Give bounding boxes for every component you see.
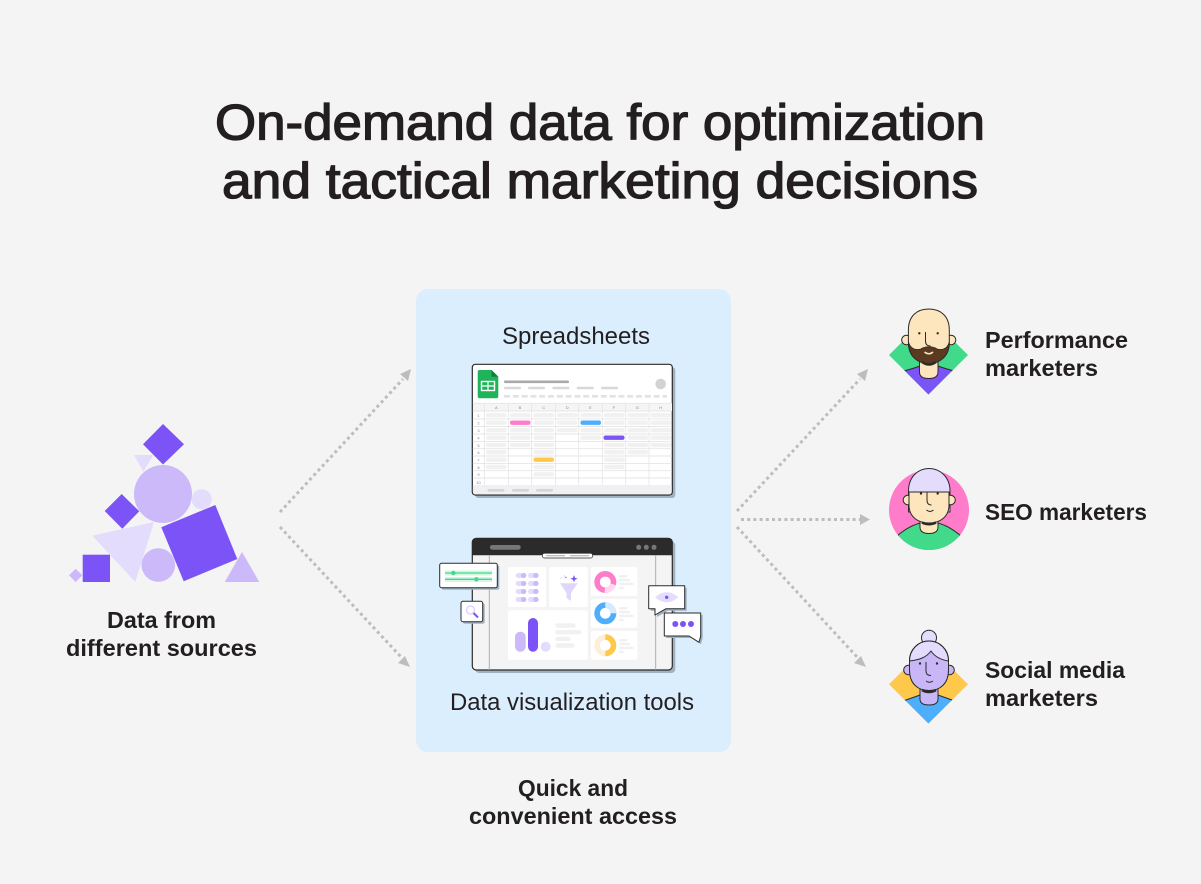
- arrow: sources to spreadsheets: [280, 369, 411, 512]
- callout: sliders: [440, 563, 499, 590]
- avatar: SEO marketer: [889, 468, 969, 555]
- grid: E: [589, 405, 592, 410]
- avatar: performance marketer: [889, 309, 968, 400]
- panel: quick and convenient access: [416, 289, 731, 752]
- grid: C: [542, 405, 545, 410]
- avatar: social media marketer: [889, 630, 968, 730]
- label: quick and convenient access: convenient access: [469, 803, 677, 829]
- grid: 2: [477, 420, 480, 426]
- icon: data sources geometric shapes: [69, 424, 259, 582]
- card: yellow donut: [591, 631, 637, 660]
- grid: H: [659, 405, 662, 410]
- label: quick and convenient access: Quick and: [518, 775, 628, 801]
- label: quick and convenient access: [469, 775, 677, 829]
- grid: 5: [477, 443, 480, 448]
- label: social media marketers: Social media: [985, 657, 1125, 683]
- grid: 10: [476, 480, 481, 485]
- title: On-demand data for optimization: [215, 94, 985, 150]
- grid: 6: [477, 450, 480, 455]
- arrow: to performance marketers: [737, 369, 868, 511]
- grid: F: [613, 405, 616, 410]
- label: SEO marketers: SEO marketers: [985, 499, 1147, 525]
- spreadsheet window: [472, 364, 675, 498]
- grid: 7: [477, 458, 480, 462]
- heading: data visualization tools: Data visualization tools: [450, 689, 694, 716]
- label: social media marketers: marketers: [985, 685, 1098, 711]
- grid: G: [636, 405, 639, 410]
- highlighted cells: [510, 420, 624, 462]
- arrow: to social media marketers: [737, 527, 866, 667]
- label: performance marketers: [985, 327, 1128, 381]
- grid: D: [566, 405, 569, 410]
- grid: B: [519, 405, 522, 410]
- grid: A: [495, 405, 498, 410]
- grid: 3: [477, 428, 480, 433]
- callout: dots speech bubble: [664, 613, 703, 644]
- card: funnel: [549, 567, 588, 607]
- arrow: sources to visualization tools: [280, 527, 410, 667]
- title: and tactical marketing decisions: [222, 153, 978, 209]
- icon: sheets logo: [478, 370, 498, 398]
- grid: 9: [477, 472, 480, 477]
- callout: eye speech bubble: [649, 586, 687, 617]
- grid: [473, 403, 672, 485]
- heading: spreadsheets: Spreadsheets: [502, 323, 650, 350]
- grid: 8: [477, 465, 480, 470]
- title: [215, 94, 985, 209]
- label: performance marketers: Performance: [985, 327, 1128, 353]
- card: table: [508, 567, 546, 607]
- label: data from different sources: Data from: [107, 607, 216, 633]
- card: pink donut: [591, 567, 637, 596]
- label: performance marketers: marketers: [985, 355, 1098, 381]
- callout: magnifier: [461, 601, 485, 624]
- card: bar chart: [508, 610, 588, 660]
- label: data from different sources: different sources: [66, 635, 257, 661]
- label: data from different sources: [66, 607, 257, 661]
- card: blue donut: [591, 599, 637, 628]
- arrow: to SEO marketers: [741, 514, 870, 525]
- label: social media marketers: [985, 657, 1125, 711]
- dashboard window: [472, 538, 675, 673]
- grid: 1: [477, 413, 480, 418]
- grid: 4: [477, 436, 480, 440]
